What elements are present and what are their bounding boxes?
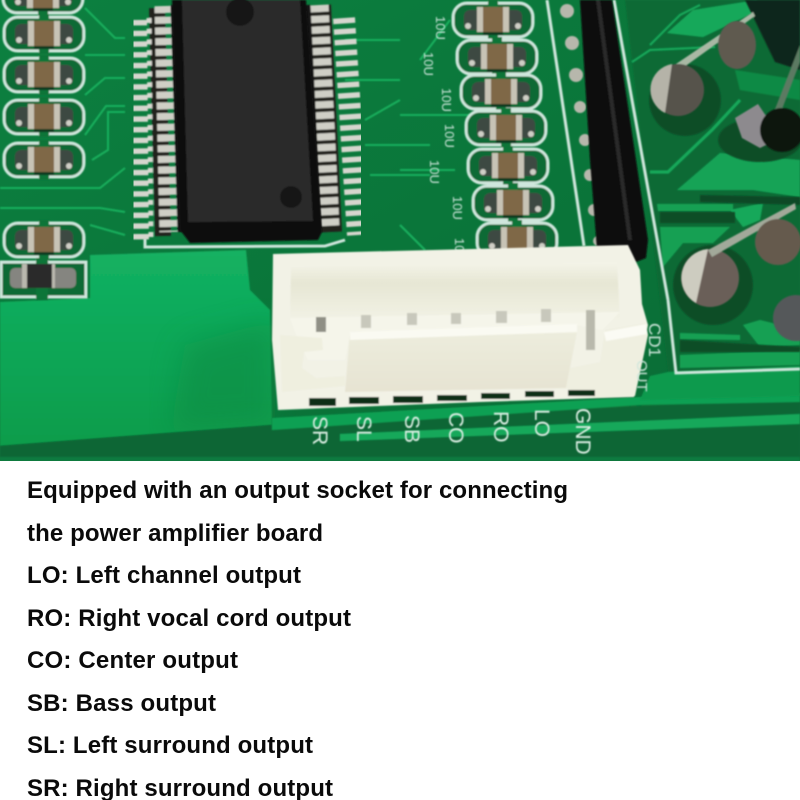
right side board area with dark traces xyxy=(625,0,800,400)
black header bar xyxy=(580,0,648,262)
green traces around chip xyxy=(0,8,480,250)
through-hole pads beside black bar xyxy=(560,4,603,246)
shadow beside connector xyxy=(170,320,275,432)
joint 4 xyxy=(681,249,739,307)
wire lead right xyxy=(770,45,800,125)
chip pins: right xyxy=(307,5,358,235)
socket floor xyxy=(290,312,620,360)
metal pins xyxy=(316,309,595,350)
description text block: SB: Bass output xyxy=(27,690,216,717)
board silkscreen labels: 10U: 10U xyxy=(439,88,454,112)
description text block: Equipped with an output socket for connecting xyxy=(27,477,568,504)
joint 1 xyxy=(652,64,704,116)
bright copper-pour area lower left xyxy=(0,250,272,446)
left tab xyxy=(280,335,345,392)
white text panel xyxy=(0,461,800,800)
top right dark wires xyxy=(745,0,800,70)
large solder joints at right xyxy=(650,0,800,341)
capacitors right column xyxy=(453,0,557,260)
silkscreen labels CD1 and OUT: CD1 xyxy=(645,323,664,357)
silkscreen labels CD1 and OUT xyxy=(633,323,664,392)
board silkscreen labels: 10U: 10U xyxy=(421,52,436,76)
joint 2 xyxy=(718,21,756,69)
dark halos around joints xyxy=(649,64,800,352)
board silkscreen labels: 10U: 10U xyxy=(450,196,465,220)
board silkscreen labels: 10U: 10 xyxy=(452,238,467,252)
silkscreen pin labels xyxy=(308,408,594,455)
description text block: LO: Left channel output xyxy=(27,562,301,589)
silkscreen pin labels: SB xyxy=(400,415,423,443)
description text block: the power amplifier board xyxy=(27,520,323,547)
joint 6 xyxy=(773,295,800,341)
description text block xyxy=(27,477,568,800)
description text block: RO: Right vocal cord output xyxy=(27,605,351,632)
joint 5 xyxy=(755,219,800,265)
silkscreen pin labels: RO xyxy=(489,411,512,442)
chip pins: left xyxy=(136,5,181,240)
socket housing xyxy=(272,245,648,410)
silkscreen labels CD1 and OUT: OUT xyxy=(633,360,650,392)
wire lead lower xyxy=(708,203,796,257)
bottom trace strip xyxy=(0,393,800,461)
board silkscreen labels: 10U xyxy=(421,16,467,252)
silkscreen pin labels: SL xyxy=(352,416,375,442)
board silkscreen labels: 10U: 10U xyxy=(442,124,457,148)
pin slots at bottom edge xyxy=(309,390,595,406)
silkscreen pin labels: CO xyxy=(444,412,467,444)
white connector socket xyxy=(272,245,648,410)
photo: circuit board with connector xyxy=(0,0,800,461)
integrated circuit chip xyxy=(172,0,322,243)
silkscreen pin labels: SR xyxy=(308,416,331,445)
socket inner wall xyxy=(290,262,620,322)
joint 3 xyxy=(735,104,772,148)
silkscreen outline lines xyxy=(145,0,800,373)
wire lead top xyxy=(676,12,755,70)
centre raised lip xyxy=(345,324,577,392)
board silkscreen labels: 10U: 10U xyxy=(427,160,442,184)
description text block: SL: Left surround output xyxy=(27,732,313,759)
capacitors left column xyxy=(1,0,86,300)
silkscreen pin labels: LO xyxy=(530,409,553,437)
right tab xyxy=(566,323,648,398)
board silkscreen labels: 10U: 10U xyxy=(433,16,448,40)
description text block: CO: Center output xyxy=(27,647,238,674)
silkscreen pin labels: GND xyxy=(571,408,594,455)
